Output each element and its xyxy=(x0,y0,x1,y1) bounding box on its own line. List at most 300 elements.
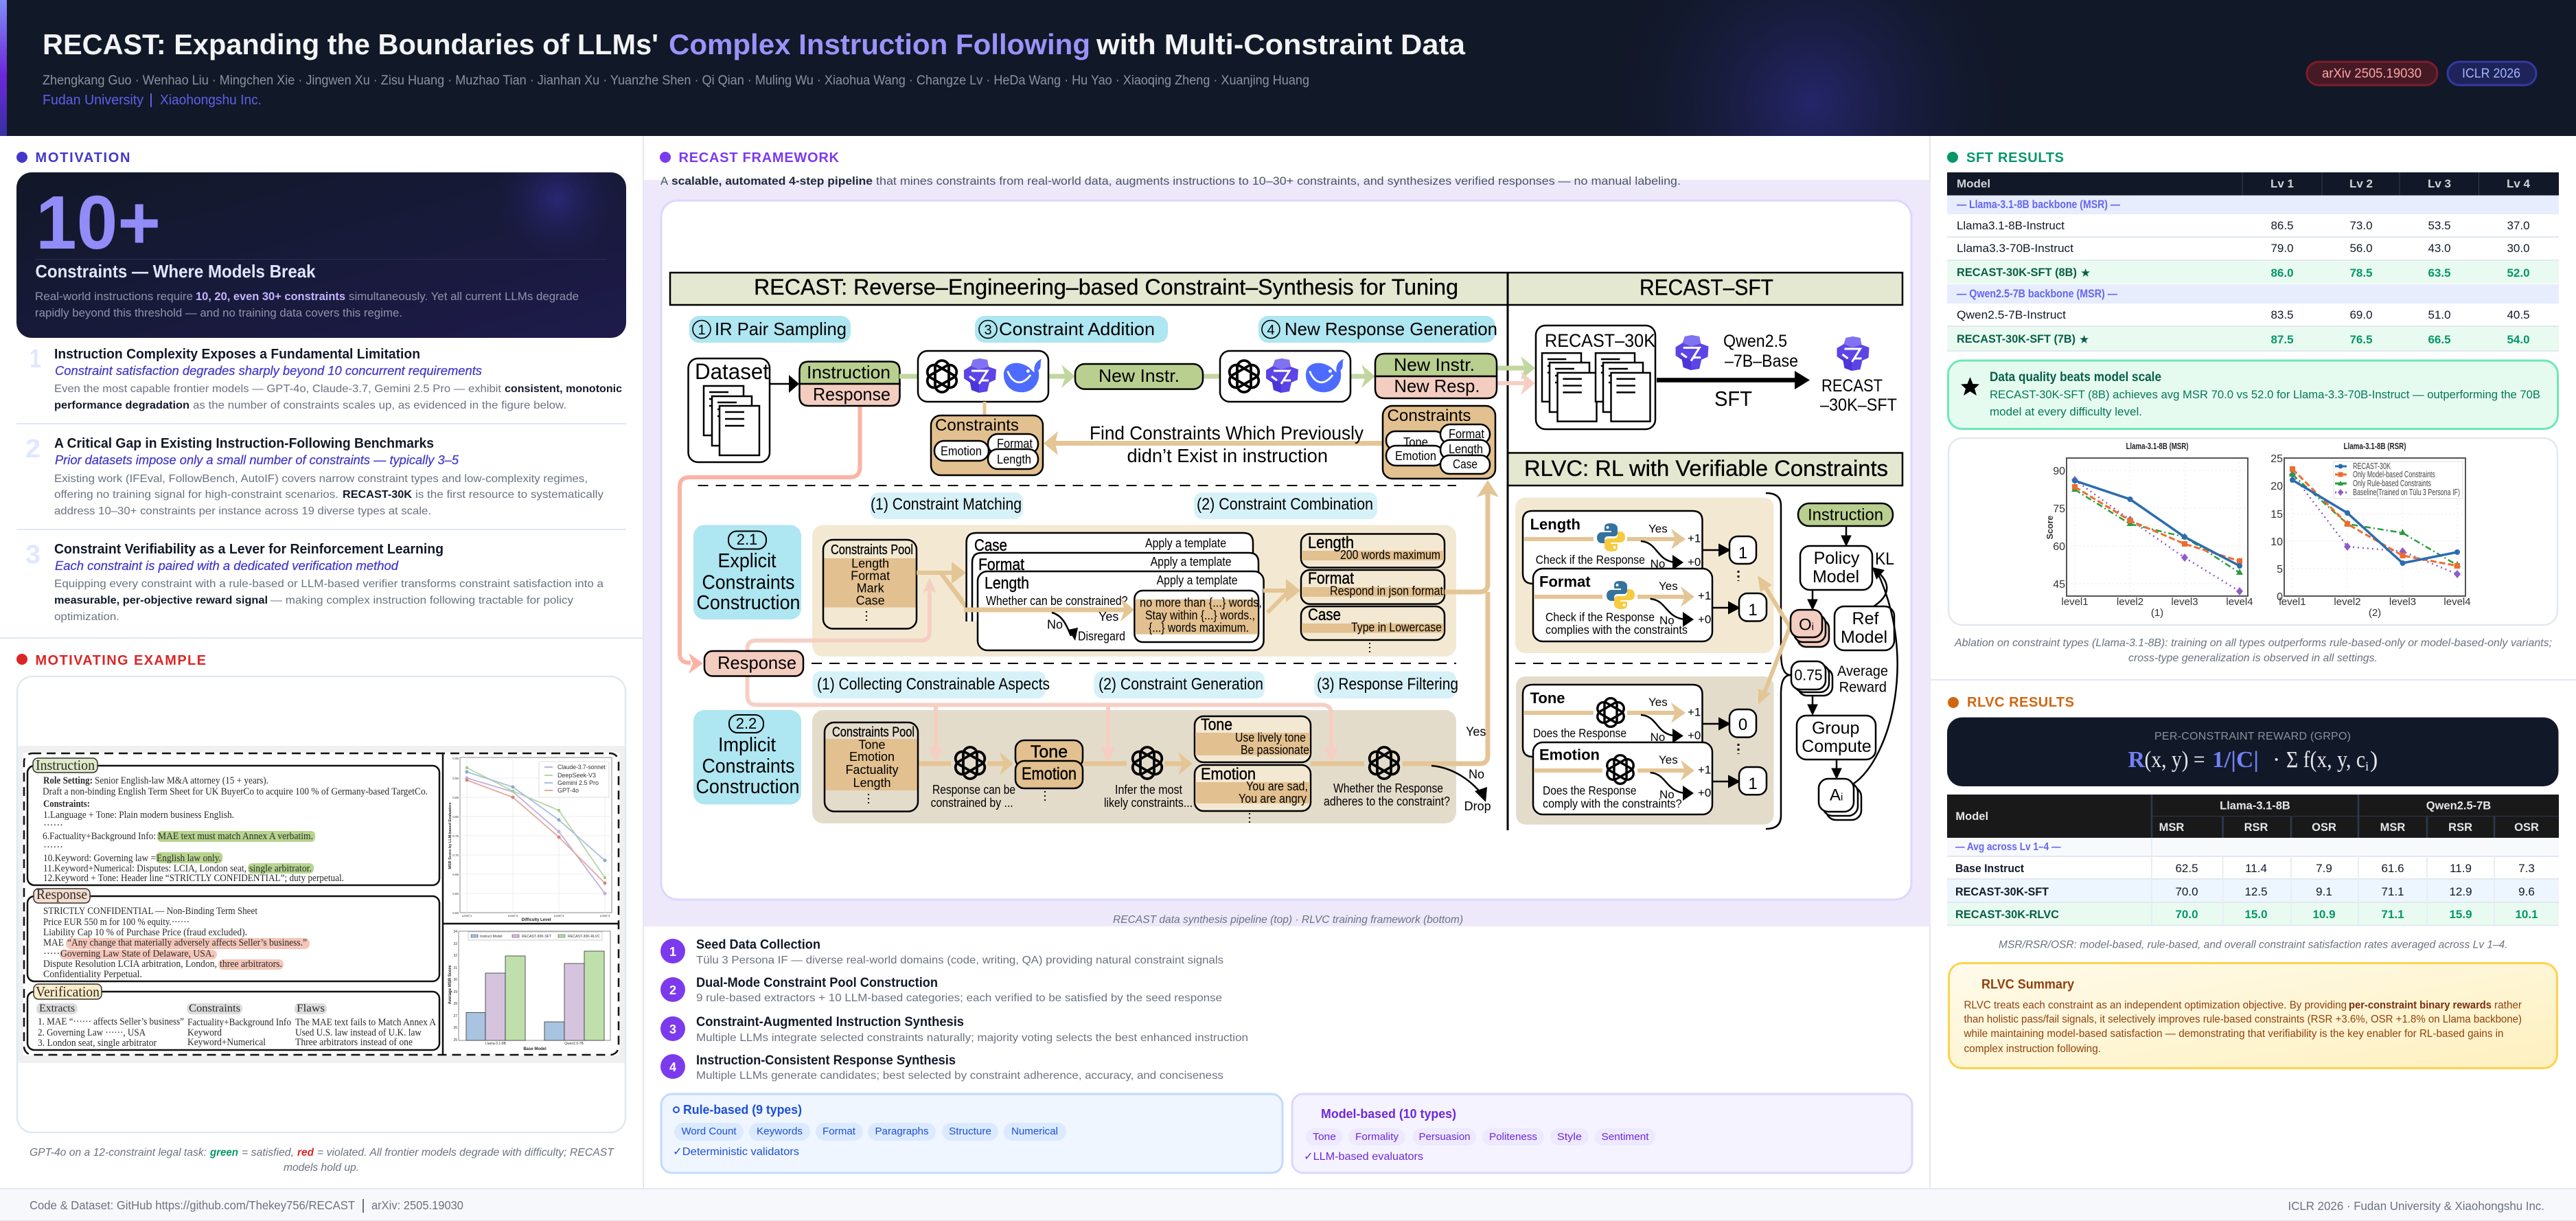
table: rlvc: OSR xyxy=(2312,821,2336,834)
step 4: Multiple LLMs generate candidates; best selected by constraint adherence, accuracy, and conciseness xyxy=(696,1070,1223,1082)
dataset box xyxy=(688,358,770,462)
generated constraint cards: You are angry xyxy=(1239,792,1307,806)
constraints set right: Length xyxy=(1449,442,1483,456)
matching cards: Length xyxy=(985,574,1029,593)
column dividers xyxy=(643,136,1930,1189)
table: rlvc: 7.9 xyxy=(2316,862,2332,875)
rlvc summary callout: complex instruction following. xyxy=(1964,1043,2101,1055)
table: rlvc: Llama-3.1-8B xyxy=(2220,799,2290,812)
instruction box: 6.Factuality+Background Info: xyxy=(43,831,156,842)
dashed separators xyxy=(698,486,1771,663)
framework intro: A xyxy=(660,175,668,187)
step 1: Seed Data Collection xyxy=(696,938,820,952)
table: rlvc: Base Instruct xyxy=(1955,863,2024,875)
pipeline steps xyxy=(660,938,1248,1082)
callout: data quality: model at every difficulty level. xyxy=(1990,405,2142,418)
step 1: Tülu 3 Persona IF — diverse real-world domains (code, writing, QA) providing natural constraint signals xyxy=(696,955,1223,966)
verifier: length: +0 xyxy=(1688,556,1701,569)
rule-based tags: Structure xyxy=(949,1126,991,1137)
example caption: = satisfied, xyxy=(242,1147,294,1159)
verifier: format xyxy=(1533,569,1712,641)
point 3: measurable, per-objective reward signal xyxy=(54,595,268,606)
instruction box: 1.Language + Tone: Plain modern business English. xyxy=(43,810,234,821)
tone and emotion pills: Tone xyxy=(1031,742,1068,762)
line chart: models by difficulty: 0.65 xyxy=(452,873,459,876)
constraints pool implicit: Emotion xyxy=(849,750,895,764)
llm step c and filter: Yes xyxy=(1466,725,1486,739)
verification box: Keyword+Numerical xyxy=(187,1037,266,1048)
verifier: length: Length xyxy=(1530,516,1580,533)
hero stat card xyxy=(16,172,626,338)
new instr new resp pair xyxy=(1375,354,1497,398)
generated constraint cards xyxy=(1195,716,1311,824)
response box: Governing Law State of Delaware, USA. xyxy=(60,948,214,959)
instruction box: English law only. xyxy=(157,853,221,864)
footer left: arXiv: 2505.19030 xyxy=(371,1198,463,1212)
tan route up to constraints xyxy=(1403,480,1499,764)
new instr box: New Instr. xyxy=(1099,365,1180,386)
table: rlvc: MSR xyxy=(2159,821,2184,834)
footer xyxy=(0,1188,2576,1221)
table: sft msr: — Llama-3.1-8B backbone (MSR) — xyxy=(1957,198,2120,211)
policy stack: Instruction xyxy=(1808,505,1883,525)
verifier: tone: Tone xyxy=(1530,689,1565,707)
model-based tags: Persuasion xyxy=(1418,1131,1471,1143)
framework intro: scalable, automated 4-step pipeline xyxy=(671,175,873,187)
chart: rsr: 5 xyxy=(2277,564,2283,575)
panel: rlvc results xyxy=(1947,695,2559,1069)
section 2.2 label: 2.2 xyxy=(736,715,757,732)
verification box: Constraints xyxy=(189,1003,240,1014)
instruction box: Draft a non-binding English Term Sheet for UK BuyerCo to acquire 100 % of Germany-based TargetCo. xyxy=(43,786,428,797)
bar chart: base model comparison: Instruct Model xyxy=(480,935,503,939)
chart: rsr: 10 xyxy=(2270,536,2283,548)
line chart: models by difficulty: 0.80 xyxy=(452,815,459,819)
table: rlvc: 9.1 xyxy=(2316,885,2332,898)
group compute xyxy=(1797,716,1876,779)
line chart: models by difficulty: Level 3 xyxy=(554,914,564,917)
verifier: format: +0 xyxy=(1698,613,1711,626)
verifier: emotion: +0 xyxy=(1698,786,1711,799)
verifier: length: No xyxy=(1651,558,1665,570)
sft training arrow: SFT xyxy=(1714,387,1752,411)
heading: motivating example: MOTIVATING EXAMPLE xyxy=(36,653,206,668)
example caption: green xyxy=(209,1147,238,1159)
point 2: 2 xyxy=(25,435,41,464)
model-based title: Model-based (10 types) xyxy=(1321,1107,1456,1121)
table: rlvc: 9.6 xyxy=(2518,885,2535,898)
formula card: 1/|C| xyxy=(2212,747,2259,773)
chart: rsr: 0 xyxy=(2277,591,2283,603)
bar chart: base model comparison: RECAST-30K-RLVC xyxy=(568,935,600,939)
line chart: models by difficulty: Gemini 2.5 Pro xyxy=(557,779,599,786)
tone and emotion pills: Emotion xyxy=(1022,764,1077,784)
example caption: = violated. All frontier models degrade with difficulty; RECAST xyxy=(317,1147,614,1159)
table: rlvc: 15.9 xyxy=(2449,908,2472,921)
verification box: 1. MAE “······ affects Seller’s business” xyxy=(38,1016,184,1027)
table: rlvc: RECAST-30K-RLVC xyxy=(1955,909,2059,921)
bar chart: base model comparison: 33 xyxy=(453,942,457,946)
chart: rsr: level3 xyxy=(2389,596,2416,608)
rlvc table caption: MSR/RSR/OSR: model-based, rule-based, and overall constraint satisfaction rates averaged across Lv 1–4. xyxy=(1999,939,2508,950)
table: rlvc: 61.6 xyxy=(2381,862,2404,875)
point 1: 1 xyxy=(30,345,41,374)
instruction and response pair: Response xyxy=(813,384,890,404)
point 1: Even the most capable frontier models — GPT-4o, Claude-3.7, Gemini 2.5 Pro — exhibit xyxy=(54,383,502,395)
model-based tags xyxy=(1306,1128,1655,1145)
constraints set left: Length xyxy=(997,453,1031,466)
chart: msr: (1) xyxy=(2151,607,2163,619)
constraints pool implicit: Constraints Pool xyxy=(832,725,915,740)
rewards: rule-based: 1 xyxy=(1738,544,1747,562)
table: rlvc: RSR xyxy=(2244,821,2268,834)
verifier: emotion: No xyxy=(1659,788,1675,801)
bar chart: base model comparison: Average MSR Score xyxy=(448,965,452,1004)
verification box: Verification xyxy=(36,983,100,1000)
panel: sft results xyxy=(1930,150,2576,681)
instruction box: ······ xyxy=(43,842,63,853)
line chart: models by difficulty: Level 1 xyxy=(462,914,472,917)
panel 2.1 background xyxy=(812,525,1456,657)
model-based tags: Style xyxy=(1557,1131,1582,1143)
step pill 4: new response generation xyxy=(1258,316,1497,343)
llm step b: likely constraints... xyxy=(1104,796,1193,810)
table: sft msr: 56.0 xyxy=(2349,242,2373,255)
panel: motivating example xyxy=(16,653,625,1174)
table: rlvc: 10.1 xyxy=(2515,908,2538,921)
table: sft msr: — Qwen2.5-7B backbone (MSR) — xyxy=(1957,288,2117,300)
model-based note: ✓LLM-based evaluators xyxy=(1304,1151,1423,1163)
connector and find arrow: Find Constraints Which Previously xyxy=(1090,422,1364,444)
step pill 1: IR pair sampling: 1 xyxy=(698,323,706,338)
constraints pool implicit xyxy=(825,722,918,812)
chart: msr: Score xyxy=(2045,516,2055,539)
bar chart: base model comparison: Llama-3.1-8B xyxy=(485,1042,507,1046)
rule-based tags: Paragraphs xyxy=(875,1126,928,1137)
verification box: Factuality+Background Info xyxy=(187,1017,291,1028)
example caption: models hold up. xyxy=(284,1162,359,1174)
reward stack: Reward xyxy=(1839,680,1887,696)
arrows: green flow xyxy=(899,356,1535,395)
constraints set right: Format xyxy=(1449,427,1484,441)
table: rlvc: 11.4 xyxy=(2245,862,2267,875)
constraints set right: Tone xyxy=(1403,435,1428,449)
line chart: models by difficulty: 0.60 xyxy=(452,892,459,895)
new instr new resp pair: New Instr. xyxy=(1394,354,1475,375)
verifier: emotion: Does the Response xyxy=(1543,784,1637,797)
badge: ICLR xyxy=(2448,62,2536,85)
table: rlvc: 7.3 xyxy=(2518,862,2535,875)
title: with Multi-Constraint Data xyxy=(1096,28,1466,60)
table: rlvc: Qwen2.5-7B xyxy=(2426,799,2491,812)
llm step a: Response can be xyxy=(932,783,1015,797)
verifier: tone: No xyxy=(1651,731,1665,744)
verification box: Keyword xyxy=(187,1027,222,1038)
panel: model-based constraints xyxy=(1292,1094,1912,1173)
verifier: tone: Does the Response xyxy=(1533,727,1626,740)
chart: rsr: (2) xyxy=(2369,607,2381,619)
rlvc summary callout: while maintaining model-based satisfaction — demonstrating that verifiability is the key enabler for RL-based gains in xyxy=(1964,1028,2503,1040)
verifier: length: Check if the Response xyxy=(1536,553,1645,567)
verifier: format: Check if the Response xyxy=(1545,610,1655,624)
example caption: red xyxy=(297,1147,314,1159)
section 2.2 label xyxy=(693,710,801,804)
outputs oi stack xyxy=(1791,610,1829,647)
figure title bars: RLVC: RL with Verifiable Constraints xyxy=(1524,456,1888,481)
formula card: ) xyxy=(2370,747,2378,773)
sub-step labels implicit: (1) Collecting Constrainable Aspects xyxy=(817,675,1050,694)
response box: “Any change that materially adversely affects Seller’s business.” xyxy=(67,937,307,948)
table: sft msr: RECAST-30K-SFT (8B) xyxy=(1957,266,2077,279)
chart: rsr: 20 xyxy=(2270,481,2283,492)
footer right: ICLR 2026 · Fudan University & Xiaohongshu Inc. xyxy=(2288,1199,2544,1213)
section 2.2 label: Implicit xyxy=(718,734,776,756)
table: sft msr: 63.5 xyxy=(2428,266,2451,279)
table: rlvc: OSR xyxy=(2514,821,2539,834)
sub-step labels implicit xyxy=(812,672,1458,698)
point 3: 3 xyxy=(25,540,41,569)
table: sft msr: ★ xyxy=(2079,333,2089,346)
chart: msr: level1 xyxy=(2061,596,2089,608)
step pill 3: constraint addition: 3 xyxy=(984,323,992,338)
rewards: rule-based xyxy=(1703,536,1767,621)
llm step a: constrained by ... xyxy=(931,796,1013,810)
table: rlvc: 71.1 xyxy=(2381,885,2404,898)
constraints pool explicit xyxy=(823,540,917,629)
step 2: 9 rule-based extractors + 10 LLM-based categories; each verified to be satisfied by the seed response xyxy=(696,992,1222,1004)
verifier: emotion: +1 xyxy=(1698,764,1711,776)
outputs ai stack xyxy=(1819,779,1861,820)
bar chart: base model comparison: 32 xyxy=(453,954,457,958)
table: rlvc: 10.9 xyxy=(2312,908,2336,921)
hero stat card: Constraints — Where Models Break xyxy=(36,261,316,282)
constraints pool explicit: Length xyxy=(851,556,889,570)
matching cards: No xyxy=(1047,618,1063,632)
group compute: Compute xyxy=(1802,737,1872,756)
heading: recast framework: RECAST FRAMEWORK xyxy=(678,150,840,166)
connector and find arrow xyxy=(985,402,1383,466)
policy stack xyxy=(1798,503,1894,610)
chart: msr: Llama-3.1-8B (MSR) xyxy=(2126,442,2189,451)
instruction box xyxy=(27,757,439,885)
sub-step labels explicit xyxy=(871,492,1377,519)
point 3: Equipping every constraint with a rule-based or LLM-based verifier transforms constraint satisfaction into a xyxy=(54,578,603,590)
combination cards: Respond in json format xyxy=(1330,584,1443,597)
verifier: tone: Yes xyxy=(1648,696,1668,709)
combination cards: 200 words maximum xyxy=(1340,548,1440,562)
hero stat card: 10, 20, even 30+ constraints xyxy=(196,290,345,303)
llm step c and filter: Drop xyxy=(1464,799,1491,813)
line chart: models by difficulty: 0.90 xyxy=(452,777,459,780)
table: rlvc: 71.1 xyxy=(2381,908,2404,921)
section 2.1 label: Construction xyxy=(696,592,801,614)
badge: arXiv xyxy=(2307,62,2437,85)
table: sft msr: Llama3.1-8B-Instruct xyxy=(1957,219,2065,232)
chart: msr xyxy=(2045,442,2253,619)
point 1: Instruction Complexity Exposes a Fundamental Limitation xyxy=(54,347,420,362)
bar chart: base model comparison: 34 xyxy=(453,930,457,934)
combination cards: Length xyxy=(1308,534,1354,552)
instruction box: 12.Keyword + Tone: Header line “STRICTLY CONFIDENTIAL”; duty perpetual. xyxy=(43,873,344,884)
step 1 xyxy=(660,938,1223,966)
verifier: format: Yes xyxy=(1659,580,1678,593)
table: rlvc: 70.0 xyxy=(2175,885,2198,898)
table: sft msr: Lv 2 xyxy=(2349,177,2373,190)
heading: rlvc results: RLVC RESULTS xyxy=(1967,695,2074,710)
ablation chart card xyxy=(1948,438,2557,625)
line chart: models by difficulty: Level 2 xyxy=(508,914,518,917)
step 3: Multiple LLMs integrate selected constraints naturally; majority voting selects the best enhanced instruction xyxy=(696,1032,1248,1044)
response box: Confidentiality Perpetual. xyxy=(43,969,142,980)
rlvc summary callout xyxy=(1948,963,2557,1069)
badge: ICLR: ICLR 2026 xyxy=(2462,67,2520,81)
title: RECAST: Expanding the Boundaries of LLMs' xyxy=(43,28,658,60)
matching cards: Case xyxy=(974,536,1007,555)
badge: arXiv: arXiv 2505.19030 xyxy=(2322,67,2422,81)
chart: rsr: level1 xyxy=(2279,596,2306,608)
chart: rsr: 15 xyxy=(2270,509,2283,521)
instruction and response pair: Instruction xyxy=(807,362,890,383)
matching cards: {...} words maximum. xyxy=(1149,621,1249,635)
rlvc summary callout: than holistic pass/fail signals, it selectively improves rule-based constraints (RSR +3.6%, OSR +1.8% on Llama backbone) xyxy=(1964,1014,2522,1025)
rlvc summary callout: RLVC Summary xyxy=(1981,977,2074,992)
generated constraint cards: Emotion xyxy=(1201,765,1256,784)
verification box: Three arbitrators instead of one xyxy=(295,1037,413,1048)
hero stat card: 10+ xyxy=(36,181,161,265)
line chart: models by difficulty: 0.95 xyxy=(452,757,459,760)
constraints pool explicit: Constraints Pool xyxy=(831,543,913,558)
line chart: models by difficulty: Claude-3.7-sonnet xyxy=(557,764,606,771)
table: sft msr: Lv 4 xyxy=(2507,177,2531,190)
sft training arrow xyxy=(1657,332,1810,411)
table: sft msr: Lv 1 xyxy=(2270,177,2294,190)
response box: STRICTLY CONFIDENTIAL — Non-Binding Term Sheet xyxy=(43,906,257,917)
table: sft msr: 86.5 xyxy=(2270,219,2294,232)
table: sft msr: 66.5 xyxy=(2428,333,2451,346)
table: rlvc: — Avg across Lv 1–4 — xyxy=(1955,841,2061,853)
point 3 xyxy=(25,540,603,623)
title xyxy=(43,28,1466,60)
sft training arrow: –7B–Base xyxy=(1725,352,1798,371)
step 3 xyxy=(660,1015,1248,1044)
example caption: GPT-4o on a 12-constraint legal task: xyxy=(30,1147,207,1159)
section 2.2 label: Constraints xyxy=(702,755,795,777)
group compute: Group xyxy=(1812,718,1859,738)
chart: rsr: 25 xyxy=(2270,453,2283,465)
table: sft msr: Lv 3 xyxy=(2428,177,2451,190)
section 2.2 label: Construction xyxy=(696,776,799,798)
table: sft msr: RECAST-30K-SFT (7B) xyxy=(1957,332,2075,345)
table: sft msr: 78.5 xyxy=(2349,266,2373,279)
point 2: RECAST-30K xyxy=(343,489,412,501)
recast-30k-sft output: –30K–SFT xyxy=(1820,396,1897,415)
point 2: is the first resource to systematically xyxy=(415,489,603,501)
model-based tags: Politeness xyxy=(1489,1131,1537,1143)
verifier: tone: +1 xyxy=(1688,705,1701,718)
rewards: model-based: 0 xyxy=(1738,716,1747,734)
constraints set right: Constraints xyxy=(1387,407,1471,425)
generated constraint cards: You are sad, xyxy=(1246,779,1308,793)
constraints pool explicit: Case xyxy=(856,593,885,607)
bar chart: base model comparison: 26 xyxy=(453,1026,457,1030)
formula card: · xyxy=(2273,747,2280,773)
verification box: The MAE text fails to Match Annex A xyxy=(295,1017,436,1028)
ablation caption xyxy=(1954,637,2552,664)
verifier: length xyxy=(1523,511,1703,584)
pipeline figure card xyxy=(661,201,1911,900)
verifier: format: Format xyxy=(1539,573,1591,591)
point 3: optimization. xyxy=(54,611,119,623)
chart legend: Only Rule-based Constraints xyxy=(2353,478,2431,488)
chart legend xyxy=(2334,461,2463,499)
verifier: tone xyxy=(1523,685,1703,757)
constraints set left: Constraints xyxy=(935,416,1019,435)
constraints pool implicit: Length xyxy=(853,776,891,790)
reward stack: 0.75 xyxy=(1795,666,1822,683)
llm step c and filter: No xyxy=(1469,768,1484,781)
constraints pool explicit: Mark xyxy=(857,581,885,595)
bar chart: base model comparison: Base Model xyxy=(523,1047,547,1051)
llm step c and filter: adheres to the constraint? xyxy=(1324,795,1450,808)
tan arrows from oi xyxy=(1758,575,1790,705)
response box: Liability Cap 10 % of Purchase Price (fraud excluded). xyxy=(43,927,247,938)
bar chart: base model comparison: 28 xyxy=(453,1002,457,1006)
policy stack: KL xyxy=(1875,549,1894,569)
line chart: models by difficulty: 0.75 xyxy=(452,834,459,838)
line chart: models by difficulty: 0.70 xyxy=(452,854,459,857)
llm ensemble 1 xyxy=(918,351,1048,402)
verifier: length: Yes xyxy=(1648,523,1668,536)
footer left: Code & Dataset: GitHub https://github.com/Thekey756/RECAST xyxy=(30,1198,355,1212)
response node: Response xyxy=(717,652,796,673)
point 1 xyxy=(30,345,622,411)
table: rlvc: 15.0 xyxy=(2244,908,2268,921)
bar chart: base model comparison: Qwen2.5-7B xyxy=(564,1042,584,1046)
table: sft msr: 53.5 xyxy=(2428,219,2451,232)
recast-30k-sft output xyxy=(1820,336,1897,415)
arrows: pool to cards xyxy=(917,562,968,610)
icon: star xyxy=(1961,377,1979,396)
chart: rsr xyxy=(2270,442,2471,619)
sft training arrow: Qwen2.5 xyxy=(1723,332,1787,351)
affiliations: Fudan University xyxy=(43,93,143,108)
verifier: format: +1 xyxy=(1698,589,1711,602)
model-based tags: Formality xyxy=(1355,1131,1399,1143)
constraints pool implicit: Tone xyxy=(858,738,886,752)
constraints set right: Emotion xyxy=(1395,449,1436,463)
chart: msr: 60 xyxy=(2053,541,2065,553)
line chart: models by difficulty xyxy=(448,757,612,922)
line chart: models by difficulty: 0.55 xyxy=(452,911,459,915)
affiliations xyxy=(43,93,262,108)
instruction box: 11.Keyword+Numerical: Disputes: LCIA, London seat, xyxy=(43,863,246,874)
point 1: performance degradation xyxy=(54,400,189,411)
ablation caption: cross-type generalization is observed in all settings. xyxy=(2128,652,2378,664)
instruction box: MAE text must match Annex A verbatim. xyxy=(158,831,313,842)
chart legend: RECAST-30K xyxy=(2353,461,2391,471)
bar chart: base model comparison xyxy=(448,930,610,1051)
table: sft msr: 83.5 xyxy=(2270,308,2294,321)
table: sft msr: 76.5 xyxy=(2349,333,2373,346)
llm ensemble 2 xyxy=(1220,351,1350,402)
verification box: 3. London seat, single arbitrator xyxy=(38,1038,157,1049)
recast-30k dataset xyxy=(1536,326,1655,429)
chart: msr: level3 xyxy=(2171,596,2198,608)
point 2 xyxy=(25,435,603,517)
table: sft msr: 79.0 xyxy=(2270,242,2294,255)
table: rlvc: 70.0 xyxy=(2175,908,2198,921)
verification box: Flaws xyxy=(297,1003,325,1014)
